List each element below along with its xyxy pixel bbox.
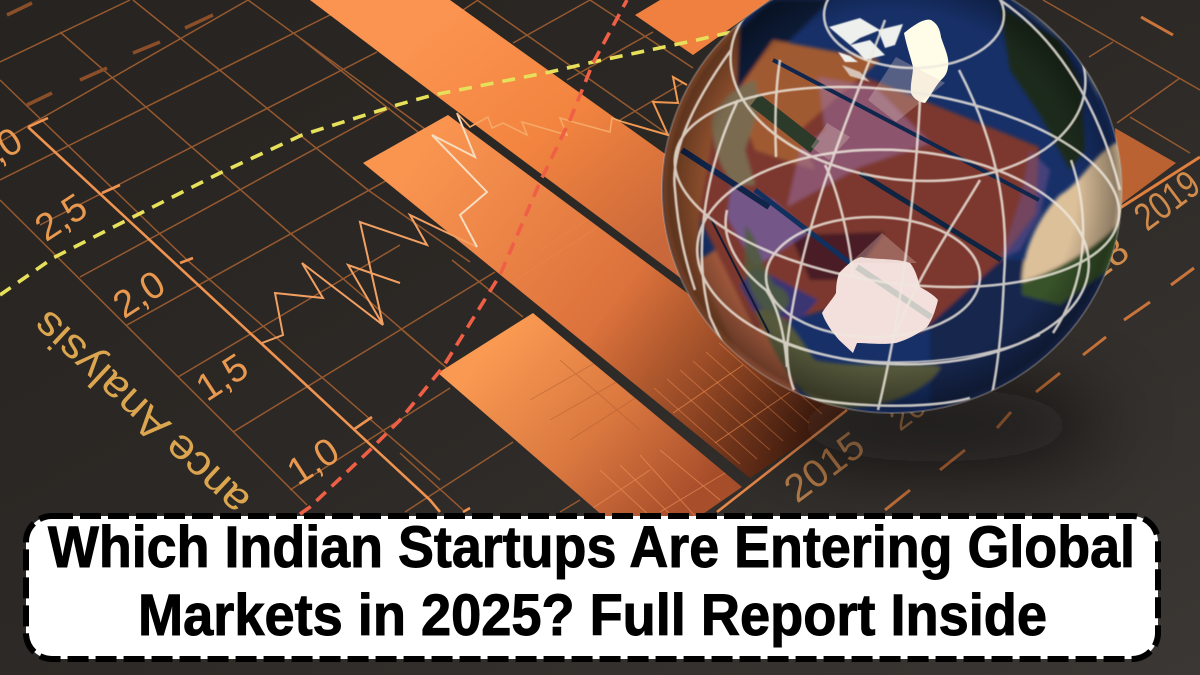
africa green <box>1022 220 1122 305</box>
antarctica band <box>857 267 931 317</box>
arctic islands <box>829 18 903 82</box>
graticule <box>662 0 1132 410</box>
globe <box>660 0 1132 420</box>
globe shadow <box>765 387 1105 463</box>
bar edge right <box>1120 157 1200 208</box>
axis title: ance Analysis <box>23 302 258 526</box>
africa <box>1022 140 1125 282</box>
navy lower right <box>928 258 1106 410</box>
bar 1 <box>310 0 710 300</box>
ocean <box>660 0 1125 420</box>
orange bars <box>310 0 1200 516</box>
zigzag line <box>262 77 687 343</box>
rim shading <box>662 0 1122 413</box>
year 2015: 2015 <box>777 424 873 511</box>
top right dark land <box>1000 7 1085 170</box>
year 20: 20 <box>883 387 933 438</box>
bar 4 <box>635 0 770 55</box>
globe body <box>660 0 1132 420</box>
blurred axis ticks <box>7 3 213 105</box>
bar 2 hatching <box>510 219 822 464</box>
axis ticks bottom right <box>885 17 1194 510</box>
bar 3 <box>438 313 742 516</box>
value 2,5: 2,5 <box>28 186 95 250</box>
value 1,0: 1,0 <box>280 430 347 494</box>
year labels <box>777 163 1200 511</box>
dark upper left <box>700 0 830 90</box>
antarctica <box>822 257 938 353</box>
title line 2: Markets in 2025? Full Report Inside <box>138 583 1047 648</box>
central america land <box>745 225 789 316</box>
title box <box>26 515 1158 659</box>
title line 1: Which Indian Startups Are Entering Global <box>48 515 1135 580</box>
purple coast <box>787 77 931 207</box>
surface artwork <box>662 0 1125 420</box>
value 2,0: 2,0 <box>106 263 173 327</box>
yellow dashed curve <box>0 30 740 295</box>
bar 2 base line <box>717 410 847 512</box>
axis values <box>0 120 347 494</box>
dark reflection stripes <box>682 60 1039 333</box>
greenland <box>904 20 948 103</box>
bar 2 <box>363 115 900 478</box>
title box frame <box>26 516 1158 659</box>
bar 3 hatching <box>530 350 730 516</box>
red dashed curve <box>300 0 627 514</box>
chart main axis <box>28 118 470 512</box>
pale reflected squares <box>811 57 945 263</box>
bar right of globe <box>1115 128 1176 205</box>
chart grid lines <box>0 0 1200 512</box>
left glass crescent <box>662 20 800 395</box>
globe rim <box>662 0 1122 413</box>
year 2018: 18 <box>1077 229 1137 289</box>
lower left reflected bar <box>696 240 800 400</box>
top right pale rim <box>1018 6 1100 98</box>
reflected chart band <box>699 40 1039 333</box>
south land <box>755 310 941 408</box>
western land <box>712 80 760 185</box>
value 1,5: 1,5 <box>189 346 256 410</box>
